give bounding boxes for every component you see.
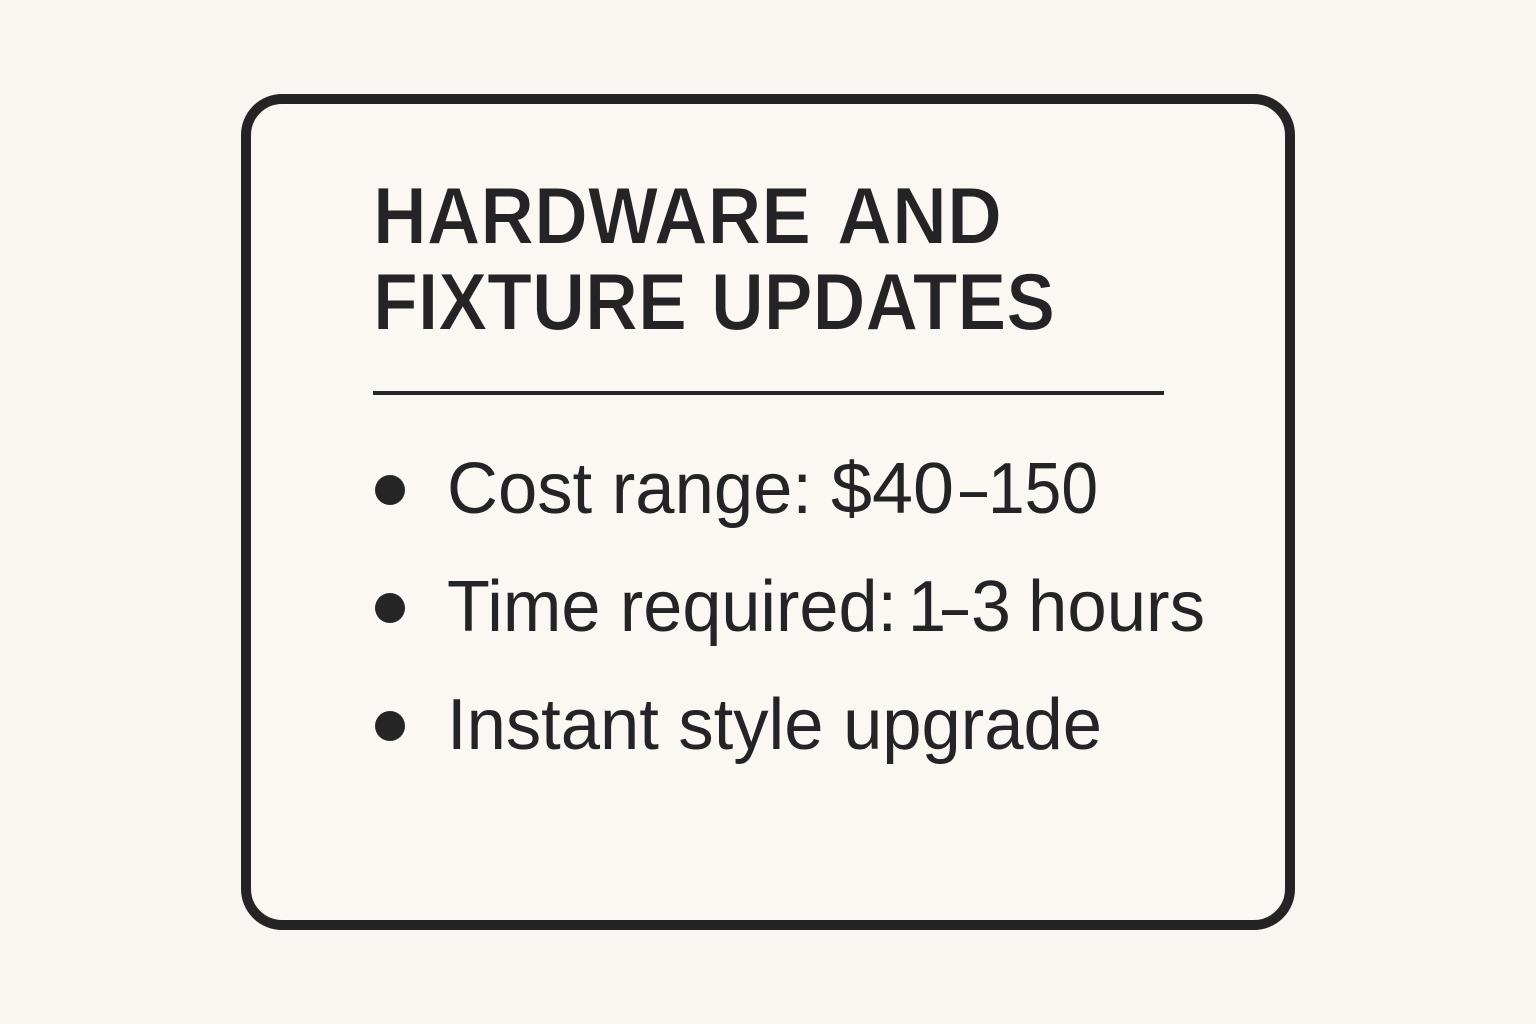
heading: AND: [837, 172, 1002, 262]
bullet: time required: Time required:: [447, 567, 897, 647]
bullet: cost range: $40: [831, 449, 954, 529]
bullet: time required: 1: [908, 567, 946, 647]
bullet: time required: hours: [1028, 567, 1205, 647]
heading: [373, 172, 1055, 348]
bullet: cost range: Cost range:: [447, 449, 812, 529]
bullet: cost range: [375, 449, 1098, 529]
bullet: time required: –: [942, 567, 969, 647]
bullet: cost range: 150: [988, 449, 1098, 529]
bullet: instant style upgrade: Instant style upgrade: [447, 685, 1102, 765]
heading divider: [373, 391, 1164, 395]
bullet: time required: 3: [971, 567, 1011, 647]
bullet list: [375, 449, 1205, 765]
heading: FIXTURE: [373, 258, 687, 348]
panel: hardware and fixture updates card: [246, 99, 1290, 925]
heading: UPDATES: [711, 258, 1055, 348]
bullet: cost range: –: [960, 449, 988, 529]
bullet: time required: [375, 567, 1205, 647]
heading: HARDWARE: [373, 172, 811, 262]
